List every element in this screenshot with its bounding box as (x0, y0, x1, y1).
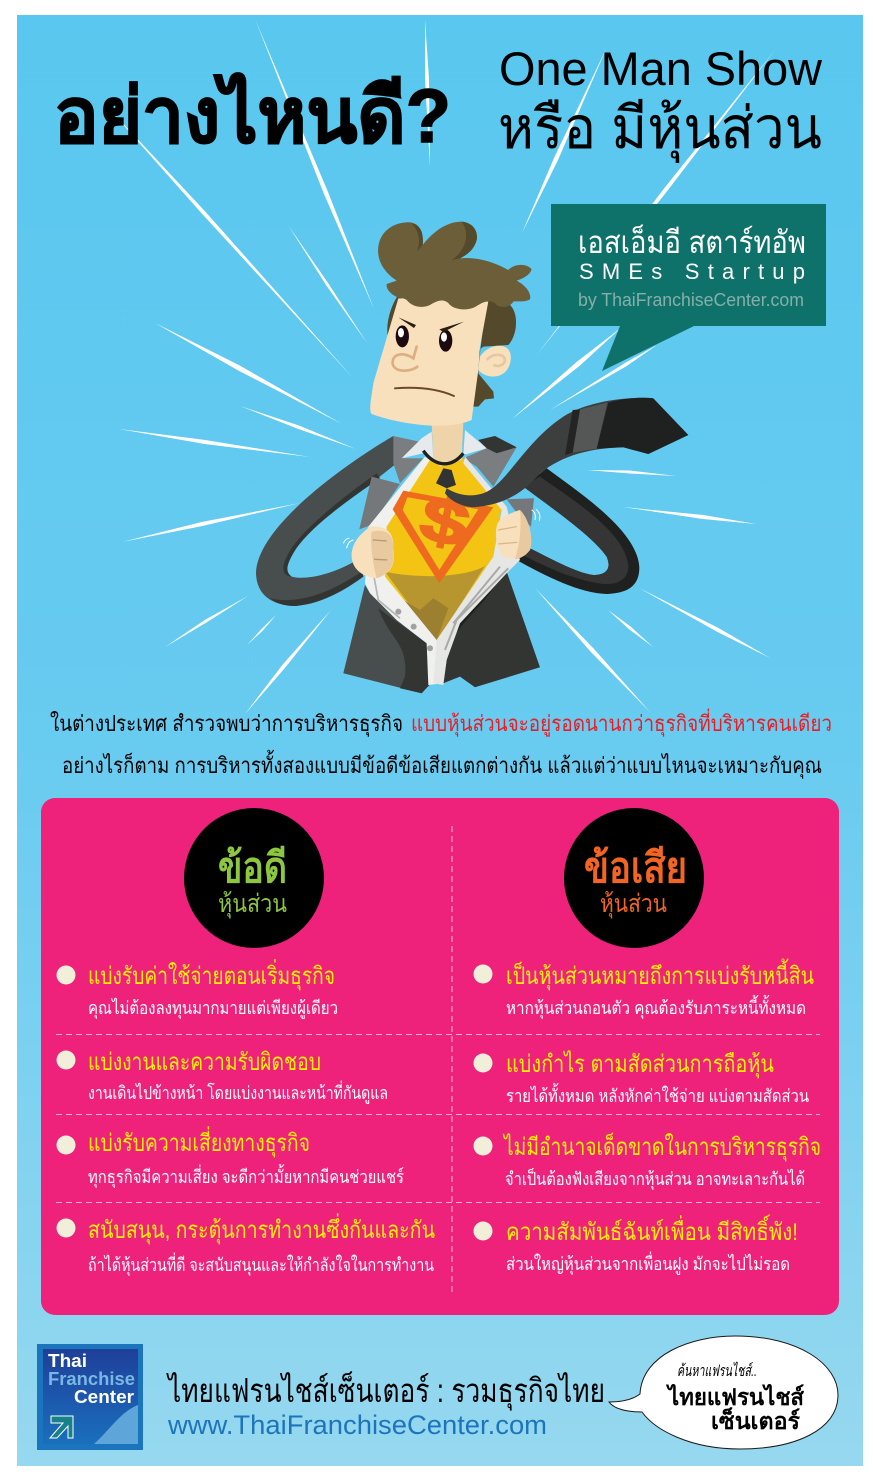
speech bubble: SMEs Startup: by ThaiFranchiseCenter.com (578, 290, 804, 310)
collar (402, 430, 487, 458)
ear (478, 346, 511, 377)
speech bubble: search prompt: ไทยแฟรนไชส์ (665, 1383, 805, 1410)
title: or have partners: หรือ มีหุ้นส่วน (498, 96, 822, 164)
badge: cons: หุ้นส่วน (600, 890, 667, 919)
speech bubble: SMEs Startup: เอสเอ็มอี สตาร์ทอัพ (578, 224, 806, 260)
footer: site name: ไทยแฟรนไชส์เซ็นเตอร์ : รวมธุรกิจไทย (166, 1371, 605, 1411)
list: pros: งานเดินไปข้างหน้า โดยแบ่งงานและหน้าที่กันดูแล (88, 1080, 388, 1104)
list: cons (474, 958, 821, 1275)
speech bubble: search prompt (609, 1336, 838, 1449)
title: One Man Show: One Man Show (499, 42, 823, 95)
nose and mouth (393, 347, 454, 396)
list: pros: แบ่งรับความเสี่ยงทางธุรกิจ (88, 1126, 310, 1158)
list: cons: ส่วนใหญ่หุ้นส่วนจากเพื่อนฝูง มักจะไปไม่รอด (506, 1251, 790, 1275)
list: cons: หากหุ้นส่วนถอนตัว คุณต้องรับภาระหนี้ทั้งหมด (506, 995, 806, 1019)
jacket collar and lapels (359, 436, 534, 529)
badge: cons (564, 808, 704, 948)
title: main question: อย่างไหนดี? (54, 72, 451, 159)
shirt buttons (395, 609, 433, 651)
speech bubble: search prompt: เซ็นเตอร์ (711, 1406, 801, 1434)
tie (423, 398, 688, 507)
list: cons: จำเป็นต้องฟังเสียงจากหุ้นส่วน อาจทะเลาะกันได้ (505, 1167, 805, 1190)
list: pros: แบ่งรับค่าใช้จ่ายตอนเริ่มธุรกิจ (88, 959, 335, 991)
logo: Thai Franchise Center: Thai (48, 1351, 87, 1371)
list: cons: รายได้ทั้งหมด หลังหักค่าใช้จ่าย แบ่งตามสัดส่วน (506, 1083, 809, 1106)
eyes and brows (396, 317, 464, 352)
list: pros: ทุกธุรกิจมีความเสี่ยง จะดีกว่ามั้ยหากมีคนช่วยแชร์ (88, 1164, 404, 1188)
character: businessman revealing superhero shirt (256, 222, 688, 693)
speech bubble: search prompt: ค้นหาแฟรนไชส์.. (677, 1361, 757, 1380)
badge: pros: หุ้นส่วน (218, 890, 287, 919)
list: cons: เป็นหุ้นส่วนหมายถึงการแบ่งรับหนี้สิน (506, 958, 814, 991)
list: pros: สนับสนุน, กระตุ้นการทำงานซึ่งกันและกัน (88, 1213, 435, 1245)
footer: website url: www.ThaiFranchiseCenter.com (167, 1410, 547, 1440)
column and row dividers (56, 826, 820, 1295)
list: pros: คุณไม่ต้องลงทุนมากมายแต่เพียงผู้เดียว (88, 997, 338, 1019)
intro paragraph (50, 708, 832, 779)
list: cons: แบ่งกำไร ตามสัดส่วนการถือหุ้น (506, 1050, 774, 1079)
panel: pros and cons (41, 798, 839, 1315)
head (370, 298, 488, 426)
open white shirt (365, 457, 520, 685)
logo: Thai Franchise Center: Franchise (48, 1369, 135, 1389)
list: pros: แบ่งงานและความรับผิดชอบ (88, 1049, 321, 1076)
hair back (387, 295, 516, 407)
hair top (378, 222, 532, 309)
badge: pros: ข้อดี (218, 844, 287, 891)
jacket lower body (343, 585, 429, 693)
list: cons: ความสัมพันธ์ฉันท์เพื่อน มีสิทธิ์พัง! (506, 1214, 798, 1246)
super emblem (393, 483, 493, 583)
list: pros (56, 959, 435, 1276)
neck (432, 423, 463, 467)
right arm (517, 468, 639, 594)
speech bubble: SMEs Startup (551, 204, 826, 371)
intro paragraph: ในต่างประเทศ สำรวจพบว่าการบริหารธุรกิจ (50, 711, 403, 737)
motion marks (343, 509, 540, 548)
hair shading (412, 222, 477, 260)
list: pros: ถ้าได้หุ้นส่วนที่ดี จะสนับสนุนและให้กำลังใจในการทำงาน (88, 1252, 434, 1276)
logo: Thai Franchise Center (37, 1344, 143, 1450)
logo: Thai Franchise Center: Center (74, 1387, 134, 1407)
left arm (256, 436, 397, 606)
speech bubble: SMEs Startup: SMEs Startup (579, 259, 805, 284)
burst rays (103, 19, 775, 714)
super emblem: $ (414, 483, 476, 560)
torso shirt (385, 458, 502, 640)
fists (352, 510, 531, 578)
badge: pros (184, 808, 324, 948)
badge: cons: ข้อเสีย (584, 844, 687, 891)
